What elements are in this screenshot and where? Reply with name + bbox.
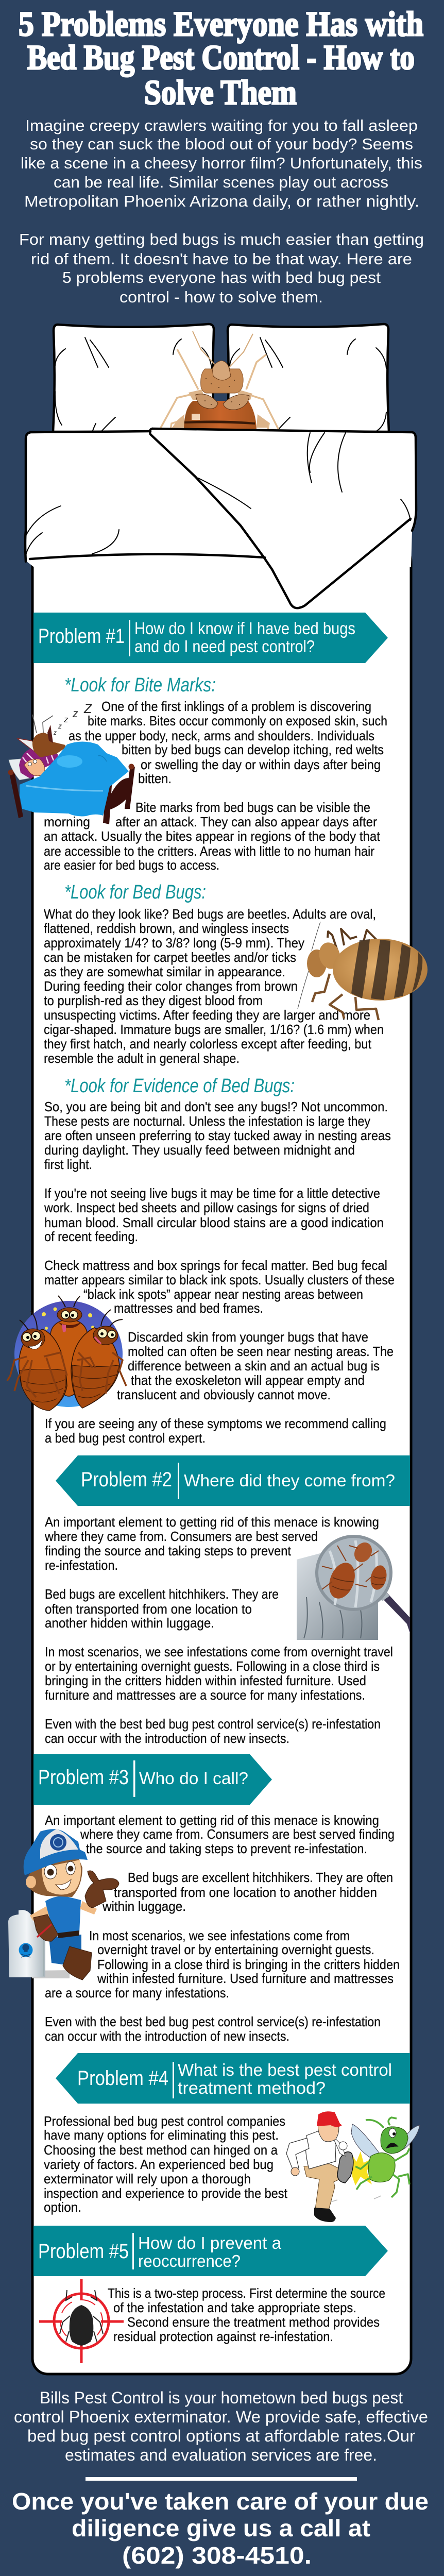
intro text: control - how to solve them.	[119, 288, 323, 306]
problem 2 banner: Where did they come from?	[184, 1471, 395, 1490]
problem 2 banner: Problem #2	[81, 1468, 172, 1491]
text: best treatment method: exterminator will rely upon a thorough	[44, 2171, 251, 2187]
text: evidence: If you are seeing any of these symptoms we recommend calling	[45, 1416, 386, 1431]
pillow	[9, 758, 31, 780]
right bug	[71, 1326, 126, 1408]
text: best treatment method	[44, 2113, 288, 2215]
text: evidence: matter appears similar to black ink spots. Usually clusters of these	[44, 1272, 395, 1287]
company description	[14, 2388, 428, 2464]
text: bite marks: Bite marks from bed bugs can be visible the	[135, 800, 370, 815]
text: prevent reoccurrence: residual protection against re-infestation.	[113, 2329, 333, 2344]
call to action: (602) 308-4510.	[122, 2542, 312, 2569]
sleep letters: z	[63, 715, 69, 724]
text: who do i call: Following in a close third is bringing in the critters hidden	[97, 1957, 400, 1972]
intro text	[19, 116, 424, 306]
brown bed bug on pillows	[160, 331, 279, 430]
text: where did they come from: Bed bugs are excellent hitchhikers. They are	[45, 1586, 279, 1602]
intro text: Metropolitan Phoenix Arizona daily, or rather nightly.	[24, 192, 419, 210]
text: prevent reoccurrence: Second ensure the treatment method provides	[127, 2314, 380, 2330]
problem 4 banner: treatment method?	[178, 2078, 326, 2097]
text: bed bugs: to purplish-red as they digest blood from	[44, 993, 263, 1008]
text: evidence: molted can often be seen near nesting areas. The	[128, 1344, 394, 1359]
sheet fold outline	[150, 429, 411, 608]
problem 1 banner: and do I need pest control?	[134, 637, 315, 656]
problem 5 banner: How do I prevent a	[138, 2233, 282, 2252]
problem 3 banner: Problem #3	[38, 1766, 129, 1789]
text: where did they come from: Even with the best bed bug pest control service(s) re-infestation	[45, 1716, 381, 1732]
sleep letters: z	[72, 708, 78, 720]
icon: magnifying glass over bed bugs	[297, 1536, 410, 1640]
call to action: Once you've taken care of your due	[12, 2488, 429, 2515]
text: who do i call: are a source for many infestations.	[45, 1985, 229, 2001]
text: bed bugs: resemble the adult in general shape.	[44, 1050, 240, 1066]
text: bed bugs: During feeding their color changes from brown	[44, 978, 298, 994]
text: evidence: are often unseen preferring to stay tucked away in nesting areas	[44, 1128, 391, 1143]
left bug	[7, 1329, 67, 1411]
icon: large bed bug photo	[298, 922, 428, 1020]
title	[19, 4, 423, 112]
text: where did they come from	[44, 1514, 393, 1746]
text: who do i call: transported from one location to another hidden	[114, 1885, 377, 1900]
text: best treatment method: option.	[44, 2199, 81, 2215]
intro text: like a scene in a cheesy horror film? Unfortunately, this	[21, 154, 422, 172]
icon: exterminator mascot	[8, 1829, 119, 1980]
intro text: can be real life. Similar scenes play out across	[54, 173, 388, 191]
text: evidence: “black ink spots” appear near nesting areas between	[83, 1286, 363, 1302]
text: evidence	[44, 1099, 395, 1446]
bed frame	[9, 767, 135, 824]
icon: man kicking green bug	[286, 2111, 420, 2222]
text: where did they come from: An important element to getting rid of this menace is knowing	[45, 1514, 379, 1530]
text: who do i call: where they came from. Consumers are best served finding	[80, 1826, 395, 1842]
intro text: Imagine creepy crawlers waiting for you to fall asleep	[25, 116, 418, 134]
text: evidence: during daylight. They usually feed between midnight and	[44, 1142, 355, 1158]
text: bite marks: as the upper body, neck, arms and shoulders. Individuals	[69, 728, 374, 743]
face	[24, 759, 45, 776]
sleep letters	[53, 702, 92, 736]
problem 5 banner	[33, 2226, 388, 2276]
text: best treatment method: variety of factors. An experienced bed bug	[44, 2157, 274, 2172]
text: bed bugs: flattened, reddish brown, and wingless insects	[44, 921, 289, 936]
company description: bed bug pest control options at affordable rates.Our	[27, 2427, 415, 2445]
text: evidence: a bed bug pest control expert.	[45, 1430, 206, 1446]
blanket	[20, 742, 129, 816]
text: evidence: If you're not seeing live bugs it may be time for a little detective	[44, 1185, 380, 1201]
text: where did they come from: where they came from. Consumers are best served	[44, 1529, 318, 1544]
text: bite marks: after an attack. They can also appear days after	[115, 814, 377, 829]
icon: three cartoon bed bugs	[7, 1296, 126, 1411]
text: bite marks: an attack. Usually the bites appear in regions of the body that	[44, 828, 381, 844]
text: bed bugs: cigar-shaped. Immature bugs are smaller, 1/16? (1.6 mm) when	[44, 1022, 384, 1037]
sheet wrinkles	[26, 433, 411, 555]
title: Solve Them	[144, 73, 297, 112]
text: bed bugs: can be mistaken for carpet beetles and/or ticks	[44, 950, 296, 965]
text: bed bugs	[44, 906, 384, 1066]
text: bite marks: bitten by bed bugs can develop itching, red welts	[122, 742, 384, 757]
text: who do i call: can occur with the introduction of new insects.	[45, 2028, 289, 2044]
intro text: 5 problems everyone has with bed bug pest	[62, 268, 381, 286]
bug book	[17, 738, 41, 754]
text: evidence: These pests are nocturnal. Unless the infestation is large they	[44, 1113, 370, 1129]
bug body	[32, 733, 65, 764]
text: who do i call: within luggage.	[102, 1899, 186, 1914]
text: who do i call: within infested furniture. Used furniture and mattresses	[97, 1971, 394, 1986]
text: where did they come from: In most scenarios, we see infestations come from overnight travel	[45, 1644, 393, 1659]
text: bed bugs: What do they look like? Bed bugs are beetles. Adults are oval,	[44, 906, 376, 922]
sleep letters: z	[53, 729, 57, 736]
problem 2 banner	[56, 1455, 410, 1506]
left pillow	[53, 324, 214, 432]
text: bed bugs: approximately 1/4? to 3/8? long (5-9 mm). They	[44, 935, 304, 951]
text: who do i call	[45, 1812, 400, 2044]
text: best treatment method: have many options for eliminating this pest.	[44, 2127, 279, 2143]
intro text: For many getting bed bugs is much easier than getting	[19, 230, 424, 248]
text: where did they come from: re-infestation.	[45, 1557, 118, 1573]
company description: estimates and evaluation services are free.	[65, 2446, 377, 2464]
right pillow	[227, 324, 389, 432]
text: evidence: Discarded skin from younger bugs that have	[128, 1329, 368, 1345]
bed illustration	[25, 324, 416, 608]
text: bite marks: One of the first inklings of a problem is discovering	[101, 699, 371, 714]
heading: look for evidence: *Look for Evidence of Bed Bugs:	[64, 1075, 295, 1097]
text: bed bugs: they first hatch, and nearly colorless except after feeding, but	[44, 1036, 372, 1052]
text: bite marks: are easier for bed bugs to access.	[44, 857, 219, 873]
text: prevent reoccurrence: This is a two-step process. First determine the source	[108, 2285, 385, 2301]
heading: look for bite marks: *Look for Bite Marks:	[64, 674, 216, 696]
text: who do i call: In most scenarios, we see infestations come from	[89, 1928, 350, 1943]
call to action: diligence give us a call at	[72, 2515, 370, 2541]
text: where did they come from: can occur with the introduction of new insects.	[45, 1731, 289, 1746]
problem 1 banner	[33, 613, 388, 663]
text: bed bugs: as they are somewhat similar in appearance.	[44, 964, 285, 979]
text: where did they come from: another hidden within luggage.	[45, 1615, 214, 1631]
problem 4 banner: What is the best pest control	[178, 2060, 392, 2079]
text: where did they come from: or by entertaining overnight guests. Following in a close third is	[45, 1658, 380, 1674]
text: evidence: So, you are being bit and don't see any bugs!? Not uncommon.	[44, 1099, 388, 1114]
heading: look for bed bugs: *Look for Bed Bugs:	[64, 882, 206, 903]
divider	[86, 2477, 357, 2481]
problem 3 banner: Who do I call?	[139, 1769, 248, 1788]
text: evidence: translucent and obviously cannot move.	[117, 1387, 331, 1402]
text: bite marks: morning	[44, 814, 90, 829]
text: evidence: Check mattress and box springs for fecal matter. Bed bug fecal	[44, 1258, 387, 1273]
intro text: rid of them. It doesn't have to be that way. Here are	[31, 250, 412, 268]
problem 5 banner: reoccurrence?	[138, 2251, 241, 2270]
problem 4 banner	[56, 2053, 410, 2104]
text: bite marks	[44, 699, 387, 873]
problem 5 banner: Problem #5	[38, 2240, 129, 2263]
text: where did they come from: often transported from one location to	[45, 1601, 252, 1617]
text: bite marks: bite marks. Bites occur commonly on exposed skin, such	[88, 713, 387, 728]
text: evidence: human blood. Small circular blood stains are a good indication	[44, 1215, 384, 1230]
text: who do i call: Even with the best bed bug pest control service(s) re-infestation	[45, 2014, 381, 2029]
text: best treatment method: inspection and experience to provide the best	[44, 2185, 288, 2201]
text: who do i call: An important element to getting rid of this menace is knowing	[45, 1812, 379, 1828]
text: evidence: that the exoskeleton will appear empty and	[131, 1372, 365, 1388]
icon: bug in red target	[39, 2279, 124, 2363]
text: bite marks: or swelling the day or within days after being	[141, 757, 381, 772]
text: bite marks: are accessible to the critters. Areas with little to no human hair	[44, 843, 374, 859]
text: where did they come from: bringing in the critters hidden within infested furniture. Used	[45, 1673, 366, 1688]
main white panel	[32, 546, 411, 2374]
duvet	[25, 429, 416, 567]
text: who do i call: the source and taking steps to prevent re-infestation.	[86, 1841, 367, 1856]
text: who do i call: overnight travel or by entertaining overnight guests.	[97, 1942, 374, 1957]
text: bite marks: bitten.	[138, 771, 172, 786]
antennae	[32, 715, 53, 733]
sleep letters: z	[58, 722, 62, 730]
company description: control Phoenix exterminator. We provide safe, effective	[14, 2408, 428, 2426]
text: best treatment method: Choosing the best method can hinged on a	[44, 2142, 278, 2158]
problem 3 banner	[33, 1754, 272, 1805]
text: evidence: mattresses and bed frames.	[114, 1300, 263, 1316]
problem 4 banner: Problem #4	[77, 2067, 168, 2090]
text: bed bugs: unsuspecting victims. After feeding they are larger and more	[44, 1007, 370, 1023]
problem 1 banner: Problem #1	[38, 625, 125, 648]
text: evidence: difference between a skin and an actual bug is	[128, 1358, 380, 1374]
text: prevent reoccurrence: of the infestation and take appropriate steps.	[113, 2300, 356, 2315]
intro text: so they can suck the blood out of your body? Seems	[30, 135, 413, 153]
pajamas	[19, 749, 58, 779]
text: evidence: work. Inspect bed sheets and pillow casings for signs of dried	[44, 1200, 369, 1215]
company description: Bills Pest Control is your hometown bed bugs pest	[40, 2388, 403, 2407]
text: where did they come from: finding the source and taking steps to prevent	[45, 1543, 292, 1558]
text: best treatment method: Professional bed bug pest control companies	[44, 2113, 285, 2129]
icon: sleeping bug in bed	[8, 702, 135, 824]
text: prevent reoccurrence	[108, 2285, 385, 2344]
sleep letters: Z	[83, 702, 92, 716]
text: who do i call: Bed bugs are excellent hitchhikers. They are often	[128, 1870, 393, 1885]
text: evidence: of recent feeding.	[44, 1229, 138, 1244]
problem 1 banner: How do I know if I have bed bugs	[134, 619, 355, 638]
text: evidence: first light.	[44, 1157, 92, 1172]
call to action	[12, 2488, 429, 2569]
text: where did they come from: furniture and mattresses are a source for many infestations.	[45, 1687, 365, 1703]
